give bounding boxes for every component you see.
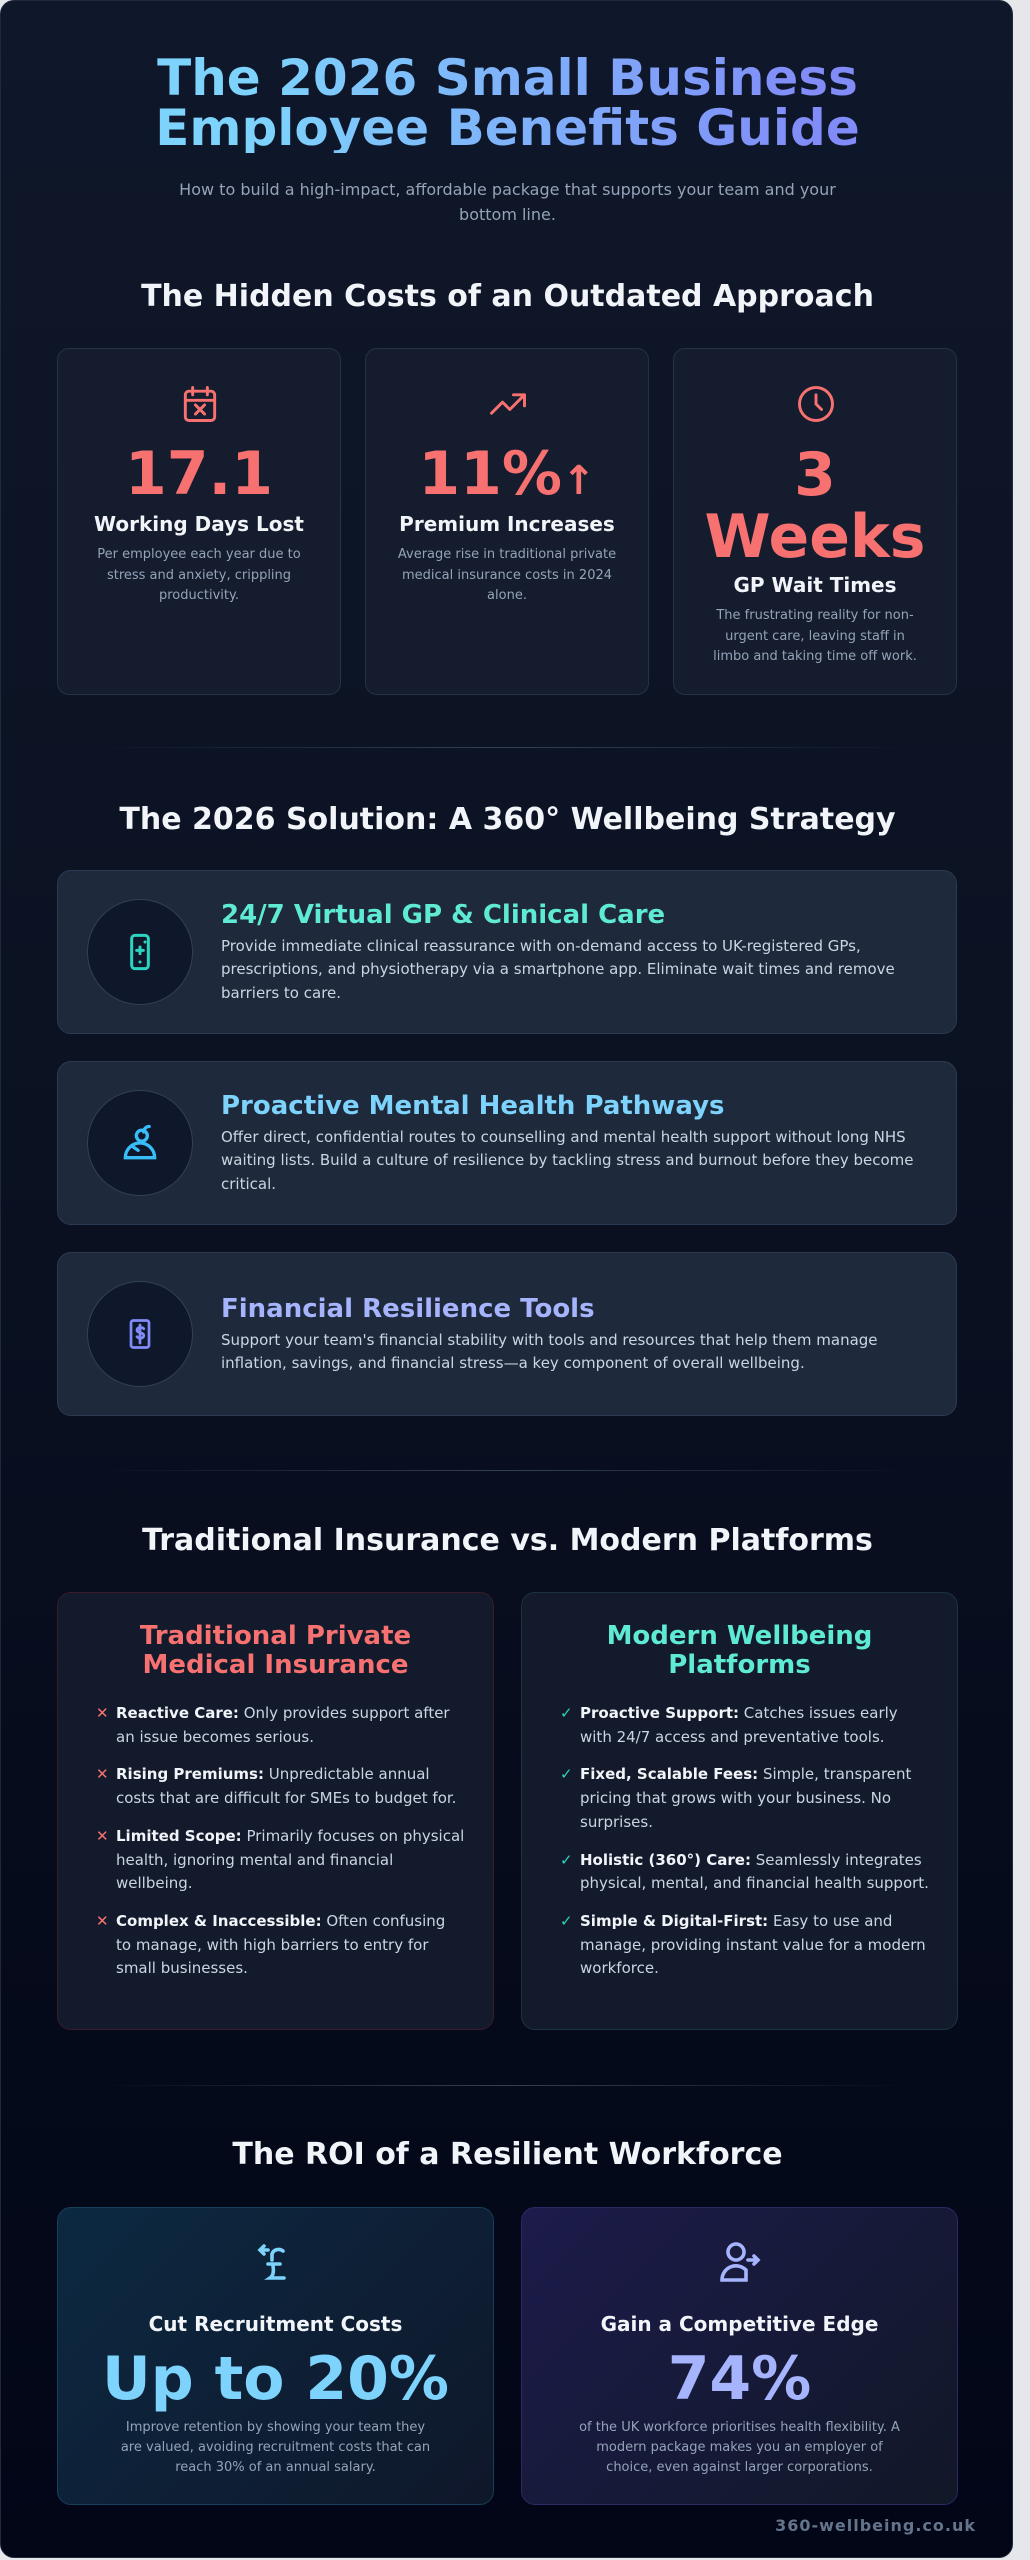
panel: mental health: Proactive Mental Health Pathways: [221, 1091, 724, 1121]
subtitle: How to build a high-impact, affordable package that supports your team and your bottom line.: [179, 180, 836, 224]
stat number: 11%↑: [418, 439, 596, 509]
icon: calendar: [184, 386, 216, 422]
stat card: premium increases: Average rise in traditional private medical insurance costs in 2024 alone.: [398, 547, 616, 603]
panel: traditional insurance: [57, 1592, 494, 2030]
title: Employee Benefits Guide: [155, 99, 860, 157]
title: The 2026 Small Business: [157, 49, 858, 107]
icon: money: [87, 1281, 193, 1387]
panel: virtual GP: 24/7 Virtual GP & Clinical Care: [221, 900, 665, 930]
stat card: premium increases: Premium Increases: [399, 512, 615, 536]
panel: modern platforms: Fixed, Scalable Fees: Simple, transparent pricing that grows with your business. No surprises.: [580, 1765, 911, 1831]
heading: comparison: Traditional Insurance vs. Modern Platforms: [142, 1523, 873, 1558]
panel: traditional insurance: Traditional Private: [140, 1621, 411, 1651]
stat card: premium increases: [365, 348, 649, 695]
icon: mind: [87, 1090, 193, 1196]
icon: person arrow: [720, 2242, 760, 2282]
icon: pound exchange: [258, 2244, 286, 2280]
panel: modern platforms: Platforms: [668, 1650, 811, 1680]
panel: competitive edge: [521, 2207, 958, 2505]
panel: traditional insurance: Medical Insurance: [142, 1650, 409, 1680]
panel: modern platforms: Proactive Support: Catches issues early with 24/7 access and preventative tools.: [580, 1704, 898, 1746]
stat card: working days lost: Per employee each year due to stress and anxiety, crippling productivity.: [97, 547, 301, 603]
panel: traditional insurance: ✕: [96, 1912, 109, 1930]
stat number: 17.1: [125, 439, 273, 509]
icon: phone: [87, 899, 193, 1005]
panel: modern platforms: ✓: [560, 1704, 573, 1722]
panel: recruitment costs: Improve retention by showing your team they are valued, avoiding recruitment costs that can reach 30% of an annual salary.: [121, 2420, 430, 2475]
heading: ROI: The ROI of a Resilient Workforce: [232, 2137, 783, 2172]
panel: financial: [57, 1252, 957, 1416]
stat number: Up to 20%: [102, 2344, 449, 2414]
stat card: working days lost: [57, 348, 341, 695]
panel: traditional insurance: Complex & Inaccessible: Often confusing to manage, with high barriers to entry for small businesses.: [116, 1912, 445, 1977]
panel: modern platforms: ✓: [560, 1851, 573, 1869]
panel: modern platforms: Holistic (360°) Care: Seamlessly integrates physical, mental, and financial health support.: [580, 1851, 929, 1892]
panel: modern platforms: Modern Wellbeing: [607, 1621, 872, 1651]
stat number: Weeks: [704, 502, 926, 572]
heading: solution: The 2026 Solution: A 360° Wellbeing Strategy: [119, 802, 896, 837]
panel: mental health: Offer direct, confidential routes to counselling and mental health support without long NHS waiting lists. Build a culture of resilience by tackling stress and burnout before they become critical.: [221, 1128, 914, 1193]
panel: virtual GP: Provide immediate clinical reassurance with on-demand access to UK-registered GPs, prescriptions, and physiotherapy via a smartphone app. Eliminate wait times and remove barriers to care.: [221, 937, 895, 1002]
stat card: working days lost: Working Days Lost: [94, 512, 304, 536]
panel: recruitment costs: [57, 2207, 494, 2505]
panel: traditional insurance: ✕: [96, 1765, 109, 1783]
panel: traditional insurance: Limited Scope: Primarily focuses on physical health, ignoring mental and financial wellbeing.: [116, 1827, 464, 1892]
panel: traditional insurance: ✕: [96, 1704, 109, 1722]
stat number: 74%: [668, 2344, 811, 2414]
panel: traditional insurance: Reactive Care: Only provides support after an issue becomes serious.: [116, 1704, 450, 1746]
panel: modern platforms: [521, 1592, 958, 2030]
heading: hidden costs: The Hidden Costs of an Outdated Approach: [141, 279, 874, 314]
stat card: GP wait times: [673, 348, 957, 695]
panel: traditional insurance: ✕: [96, 1827, 109, 1845]
panel: modern platforms: ✓: [560, 1912, 573, 1930]
icon: clock: [798, 386, 834, 422]
panel: recruitment costs: Cut Recruitment Costs: [149, 2312, 402, 2336]
stat card: GP wait times: GP Wait Times: [733, 573, 897, 597]
icon: trend up: [490, 393, 526, 415]
panel: financial: Support your team's financial stability with tools and resources that help them manage inflation, savings, and financial stress—a key component of overall wellbeing.: [221, 1330, 878, 1372]
panel: mental health: [57, 1061, 957, 1225]
panel: virtual GP: [57, 870, 957, 1034]
footer: brand: 360-wellbeing.co.uk: [775, 2516, 976, 2535]
panel: financial: Financial Resilience Tools: [221, 1294, 595, 1324]
panel: competitive edge: of the UK workforce prioritises health flexibility. A modern package makes you an employer of choice, even against larger corporations.: [579, 2420, 900, 2475]
panel: competitive edge: Gain a Competitive Edge: [601, 2312, 878, 2336]
panel: modern platforms: ✓: [560, 1765, 573, 1783]
stat card: GP wait times: The frustrating reality for non-urgent care, leaving staff in limbo and taking time off work.: [713, 608, 917, 664]
panel: traditional insurance: Rising Premiums: Unpredictable annual costs that are difficult for SMEs to budget for.: [116, 1765, 456, 1807]
panel: modern platforms: Simple & Digital-First: Easy to use and manage, providing instant value for a modern workforce.: [580, 1912, 926, 1977]
stat number: 3: [794, 440, 836, 510]
stat number: [704, 440, 926, 572]
title: [1, 53, 1014, 153]
